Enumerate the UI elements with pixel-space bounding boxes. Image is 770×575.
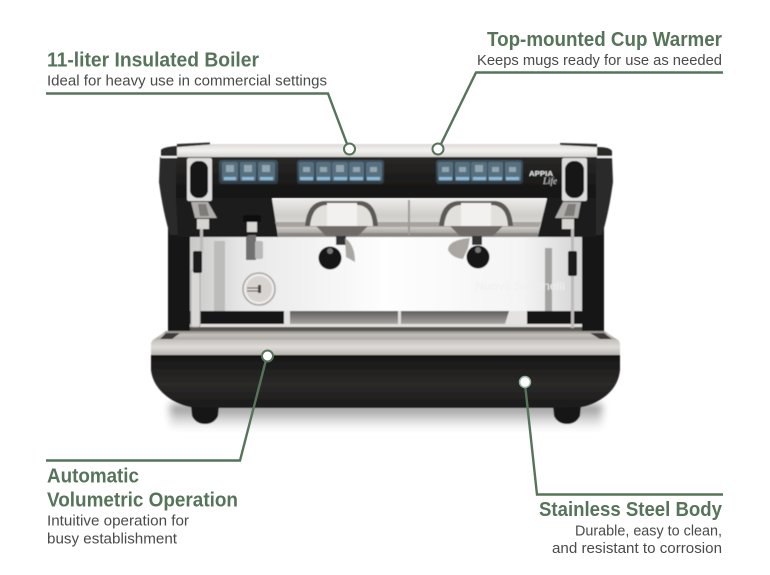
top chrome cup warmer: [177, 144, 597, 157]
left group head: [305, 201, 378, 270]
heading: Stainless Steel Body: [539, 499, 723, 521]
center lower grate: [284, 311, 294, 324]
group head housing: [272, 199, 547, 236]
center-right button panel: [436, 160, 523, 184]
center-left button panel: [297, 160, 384, 184]
backsplash: [190, 236, 582, 314]
callout: automatic volumetric operation: busy establishment: [47, 530, 178, 548]
drip tray surface: [153, 331, 618, 340]
brand label: Life: [542, 176, 557, 186]
espresso machine: [151, 142, 620, 429]
right black panel: [537, 198, 596, 237]
heading: Automatic: [47, 466, 139, 488]
faded logo on backsplash: Nuova Simonelli: [475, 279, 565, 293]
right lower opening: [527, 311, 582, 324]
pressure gauge: [243, 273, 275, 305]
left upright: [168, 225, 191, 331]
right foot: [553, 405, 581, 424]
left black panel: [176, 198, 278, 237]
leader line: [46, 94, 347, 144]
marker: [432, 144, 444, 154]
leader line: [46, 360, 266, 460]
drip tray chrome front: [151, 340, 620, 356]
floor shadow: [170, 404, 602, 429]
brand label: [529, 169, 557, 186]
heading: 11-liter Insulated Boiler: [47, 50, 259, 72]
left lower opening: [190, 311, 284, 324]
left foot: [191, 405, 219, 424]
description: Keeps mugs ready for use as needed: [477, 52, 722, 69]
callout: 11-liter insulated boiler: [46, 50, 355, 154]
base body: [151, 356, 620, 408]
marker: [262, 350, 273, 362]
right side column: [582, 157, 613, 235]
description: Intuitive operation for: [47, 512, 189, 530]
callout: automatic volumetric operation: [46, 350, 273, 548]
left side column: [159, 157, 190, 235]
description: Durable, easy to clean,: [575, 522, 722, 540]
leader line: [441, 72, 723, 144]
marker: [520, 376, 530, 388]
callout: stainless steel body: [520, 376, 723, 557]
top right cap: [560, 143, 612, 157]
right steam knob: [555, 158, 587, 229]
brand label: APPIA: [529, 169, 554, 178]
control band: [176, 157, 596, 198]
right group head: [439, 201, 513, 268]
left steam wand: [191, 229, 203, 327]
leader line: [525, 384, 723, 494]
description: Ideal for heavy use in commercial settings: [47, 72, 327, 90]
top left cap: [161, 142, 210, 156]
heading: Top-mounted Cup Warmer: [487, 29, 722, 51]
callout: top-mounted cup warmer: [432, 29, 723, 154]
marker: [344, 144, 355, 154]
left back valves: [214, 241, 225, 311]
callout: stainless steel body: and resistant to corrosion: [552, 540, 722, 557]
hot water tap: [243, 215, 263, 260]
right upright: [581, 225, 604, 331]
left steam knob: [187, 158, 217, 229]
left button panel: [219, 160, 278, 184]
callout: automatic volumetric operation: Volumetric Operation: [47, 490, 238, 512]
right steam wand: [568, 229, 577, 328]
right back valves: [545, 248, 552, 311]
